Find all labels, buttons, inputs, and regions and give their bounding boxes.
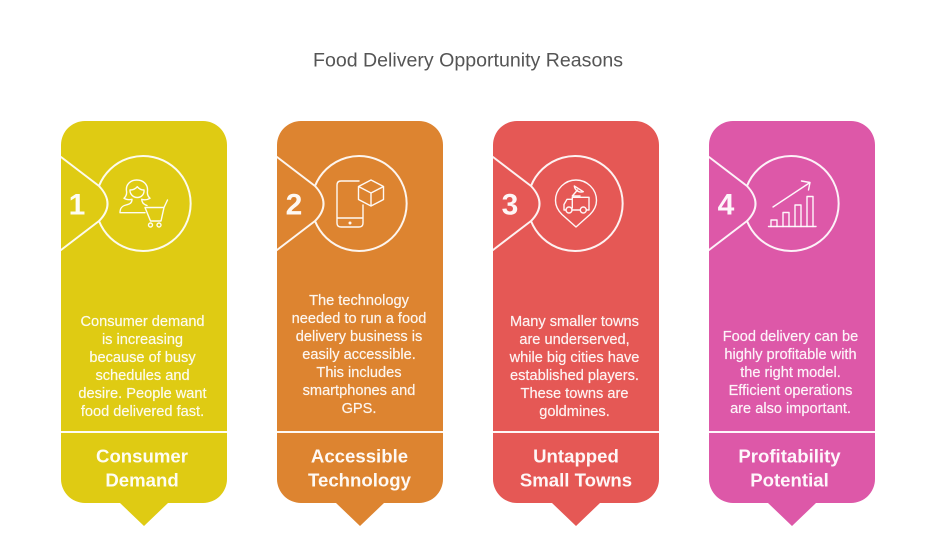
number: 4 <box>718 188 735 222</box>
description: This includes <box>316 365 402 381</box>
heading: Consumer <box>96 446 188 466</box>
description: schedules and <box>95 368 190 384</box>
number: 2 <box>286 188 302 222</box>
divider <box>61 431 227 433</box>
description: needed to run a food <box>292 311 426 327</box>
number badge and circle outline <box>277 156 407 251</box>
description: because of busy <box>89 350 196 366</box>
description: The technology <box>309 293 410 309</box>
card shape <box>493 121 659 526</box>
heading: Accessible <box>311 446 408 466</box>
description: These towns are <box>521 386 628 402</box>
heading: Demand <box>105 470 179 490</box>
description: Consumer demand <box>80 314 205 330</box>
number badge and circle outline <box>709 156 839 251</box>
divider <box>493 431 659 433</box>
description: GPS. <box>342 401 376 417</box>
description: are underserved, <box>519 332 630 348</box>
description: easily accessible. <box>302 347 416 363</box>
heading: Small Towns <box>520 470 632 490</box>
icon: phone with package <box>337 180 384 227</box>
number badge and circle outline <box>493 156 623 251</box>
description: Efficient operations <box>729 383 852 399</box>
divider <box>709 431 875 433</box>
card shape <box>277 121 443 526</box>
number: 1 <box>69 188 85 222</box>
description: while big cities have <box>509 350 639 366</box>
card shape <box>709 121 875 526</box>
description: established players. <box>510 368 639 384</box>
icon: rising bar chart with arrow <box>768 181 816 226</box>
number badge and circle outline <box>61 156 191 251</box>
panel: profitability potential <box>709 121 875 526</box>
description: are also important. <box>730 401 851 417</box>
description: is increasing <box>102 332 183 348</box>
description: desire. People want <box>78 386 207 402</box>
heading: Potential <box>750 470 829 490</box>
number: 3 <box>502 188 518 222</box>
heading: Profitability <box>738 446 841 466</box>
icon: customer with shopping cart <box>120 180 168 227</box>
description: food delivered fast. <box>81 404 204 420</box>
heading: Technology <box>308 470 412 490</box>
panel: accessible technology <box>277 121 443 526</box>
title: Food Delivery Opportunity Reasons <box>313 50 623 72</box>
description: the right model. <box>740 365 841 381</box>
divider <box>277 431 443 433</box>
icon: location pin with truck and satellite dish <box>556 180 596 227</box>
panel: untapped small towns <box>493 121 659 526</box>
description: goldmines. <box>539 404 610 420</box>
description: Food delivery can be <box>723 329 858 345</box>
panel: consumer demand <box>61 121 227 526</box>
heading: Untapped <box>533 446 619 466</box>
description: delivery business is <box>296 329 422 345</box>
description: Many smaller towns <box>510 314 639 330</box>
card shape <box>61 121 227 526</box>
description: highly profitable with <box>724 347 857 363</box>
description: smartphones and <box>303 383 415 399</box>
